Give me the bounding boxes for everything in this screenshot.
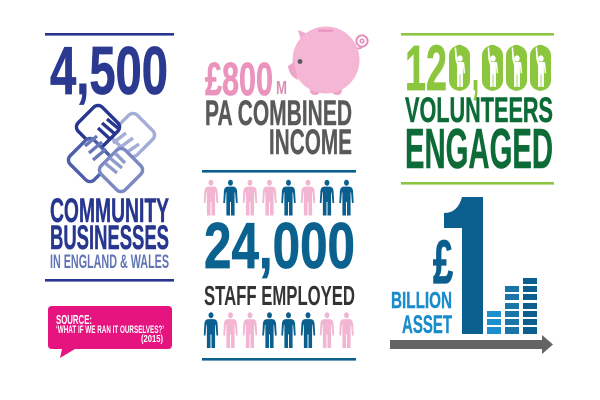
label: pa combined income xyxy=(205,94,352,162)
icons: volunteers xyxy=(455,47,546,87)
label: pa combined income: INCOME xyxy=(269,123,352,162)
callout: source: ‘WHAT IF WE RAN IT OURSELVES?’ xyxy=(56,324,164,336)
top rule xyxy=(45,33,174,36)
top rule xyxy=(401,33,554,36)
panel: community businesses xyxy=(45,33,174,282)
bottom rule xyxy=(45,279,174,282)
heading: community businesses: BUSINESSES xyxy=(50,219,169,257)
unit: M: M xyxy=(276,78,287,98)
heading: community businesses: COMMUNITY xyxy=(50,192,169,230)
figure: 120,000: 0 xyxy=(507,32,526,104)
figure: 120,000: , xyxy=(472,32,479,104)
callout: source: SOURCE: xyxy=(56,312,92,327)
figure: 120,000: 0 xyxy=(483,32,502,104)
icon: piggy bank xyxy=(288,26,368,95)
panel: assets xyxy=(390,197,553,354)
label: billion asset: ASSET xyxy=(402,311,452,339)
bar chart xyxy=(487,278,537,334)
figure: 24,000: 24,000 xyxy=(204,209,355,282)
figure: 4,500: 4,500 xyxy=(50,33,168,109)
figure: 1 xyxy=(444,197,483,334)
bottom rule xyxy=(202,358,356,361)
callout: source xyxy=(48,306,172,358)
top rule xyxy=(202,170,356,173)
heading: community businesses xyxy=(50,192,169,257)
bottom rule xyxy=(401,182,554,185)
figure: £: £ xyxy=(433,228,453,296)
label: billion asset xyxy=(391,287,452,339)
people row bottom xyxy=(204,312,354,348)
figure: 120,000 xyxy=(405,32,550,104)
people row top xyxy=(204,180,354,216)
label: staff employed: STAFF EMPLOYED xyxy=(204,280,355,311)
panel: staff xyxy=(202,170,356,361)
figure: £800M: £800 xyxy=(205,53,273,105)
figure: 120,000: 0 xyxy=(450,32,469,104)
label: billion asset: BILLION xyxy=(391,287,452,313)
figure: 120,000: 12 xyxy=(405,32,447,104)
label: volunteers engaged xyxy=(405,91,553,181)
subheading: IN ENGLAND & WALES xyxy=(50,252,169,273)
callout: source: (2015) xyxy=(141,333,163,345)
figure: 120,000: 0 xyxy=(531,32,550,104)
arrow xyxy=(390,335,553,354)
panel: volunteers xyxy=(401,32,554,185)
volunteer pills xyxy=(449,46,551,90)
label: pa combined income: PA COMBINED xyxy=(205,94,352,133)
icon: joined hands xyxy=(66,103,157,194)
panel: assets: 1 xyxy=(442,155,490,377)
panel: income xyxy=(205,26,368,162)
